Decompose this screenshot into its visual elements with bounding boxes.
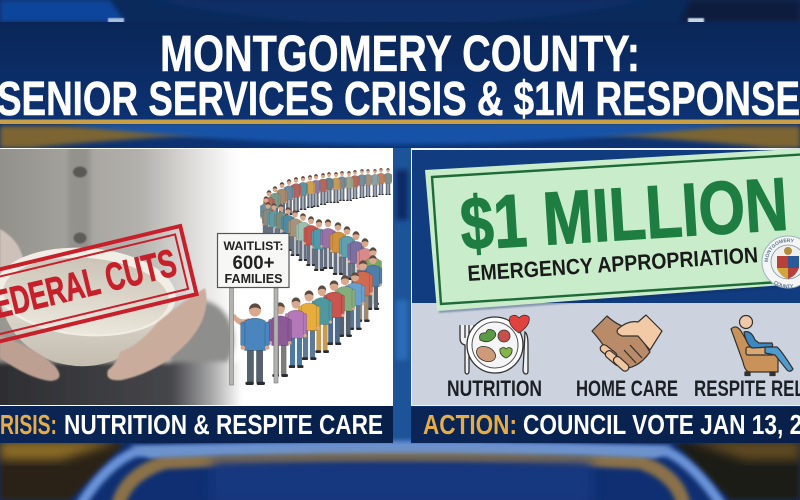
sign: waitlist: FAMILIES (224, 272, 282, 286)
icon: nutrition (460, 315, 529, 374)
panel: crisis (0, 140, 393, 412)
sign: waitlist (218, 234, 289, 385)
icon: respite chair (731, 316, 793, 376)
caption: action: ACTION: (423, 409, 517, 440)
sign: waitlist: WAITLIST: (224, 239, 284, 253)
seal: COUNTY (774, 281, 793, 288)
illustration: waiting line (231, 168, 392, 385)
gold divider (0, 120, 800, 124)
check: $1 million (425, 148, 800, 314)
sign: waitlist: 600+ (232, 252, 274, 274)
icon labels: NUTRITION (447, 376, 542, 401)
caption: action (411, 407, 800, 443)
title (0, 25, 800, 126)
hands (0, 288, 207, 381)
title: MONTGOMERY COUNTY: (160, 25, 640, 82)
photo: hands holding empty bowl (0, 140, 242, 412)
seal (762, 236, 800, 288)
icon: handshake (592, 315, 662, 373)
panel: response (411, 148, 800, 406)
caption: crisis: NUTRITION & RESPITE CARE (64, 409, 383, 440)
icon labels (447, 376, 800, 401)
check: $1 million: EMERGENCY APPROPRIATION (467, 242, 759, 286)
seal: MONTGOMERY (764, 238, 794, 262)
stamp: federal cuts (0, 226, 197, 347)
icon labels: HOME CARE (576, 376, 678, 401)
caption: crisis (0, 406, 393, 443)
bowl (0, 242, 179, 366)
